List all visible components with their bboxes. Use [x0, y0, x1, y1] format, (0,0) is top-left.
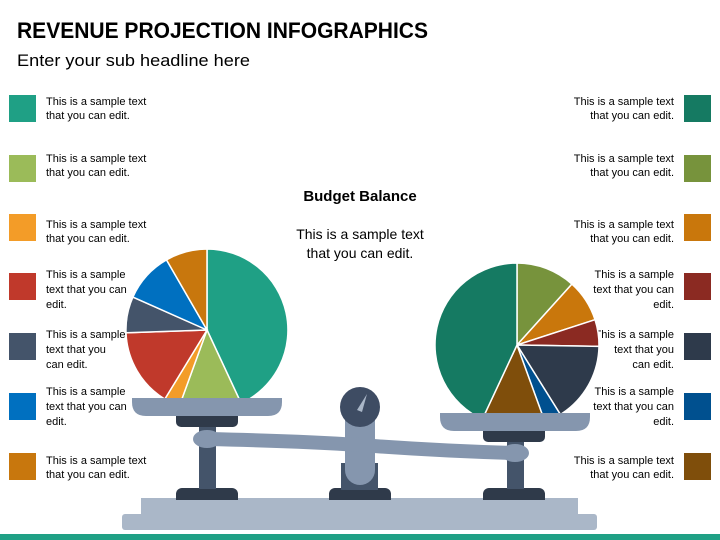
left legend: edit. [46, 299, 67, 311]
left post [176, 488, 238, 500]
right legend: that you can edit. [590, 233, 674, 245]
right pan [440, 413, 590, 431]
center text: that you can edit. [307, 245, 413, 261]
right pie chart [435, 263, 599, 427]
beam [207, 432, 515, 460]
right legend: text that you can [593, 284, 674, 296]
right legend: can edit. [632, 359, 674, 371]
balance scale [122, 387, 597, 530]
left legend: can edit. [46, 359, 88, 371]
right legend: This is a sample text [574, 219, 674, 231]
right legend: This is a sample [595, 386, 674, 398]
right legend: text that you [614, 344, 674, 356]
left pan [132, 398, 282, 416]
center support [329, 488, 391, 500]
right legend: that you can edit. [590, 110, 674, 122]
left legend: This is a sample text [46, 455, 146, 467]
right legend: This is a sample [595, 329, 674, 341]
center heading [296, 188, 424, 261]
right legend: that you can edit. [590, 167, 674, 179]
left legend: This is a sample text [46, 96, 146, 108]
left legend: This is a sample text [46, 219, 146, 231]
right legend [574, 95, 711, 481]
center heading: Budget Balance [303, 188, 417, 205]
left legend: text that you can [46, 401, 127, 413]
right post [483, 488, 545, 500]
subtitle: Enter your sub headline here [17, 51, 250, 70]
dial [340, 387, 380, 427]
left legend: that you can edit. [46, 233, 130, 245]
left legend [9, 95, 146, 481]
left legend: This is a sample [46, 329, 125, 341]
right legend: edit. [653, 416, 674, 428]
left legend: text that you can [46, 284, 127, 296]
right legend: This is a sample text [574, 153, 674, 165]
left legend: that you can edit. [46, 469, 130, 481]
left legend: This is a sample text [46, 153, 146, 165]
left legend: edit. [46, 416, 67, 428]
right legend: text that you can [593, 401, 674, 413]
title: REVENUE PROJECTION INFOGRAPHICS [17, 18, 428, 43]
bottom bar [0, 534, 720, 540]
right legend: This is a sample [595, 269, 674, 281]
left legend: text that you [46, 344, 106, 356]
left pie chart [126, 249, 288, 411]
center text: This is a sample text [296, 226, 424, 242]
right legend: This is a sample text [574, 455, 674, 467]
base plates [122, 514, 597, 530]
left legend: This is a sample [46, 386, 125, 398]
left legend: that you can edit. [46, 167, 130, 179]
left legend: This is a sample [46, 269, 125, 281]
right legend: that you can edit. [590, 469, 674, 481]
right legend: edit. [653, 299, 674, 311]
left legend: that you can edit. [46, 110, 130, 122]
right legend: This is a sample text [574, 96, 674, 108]
